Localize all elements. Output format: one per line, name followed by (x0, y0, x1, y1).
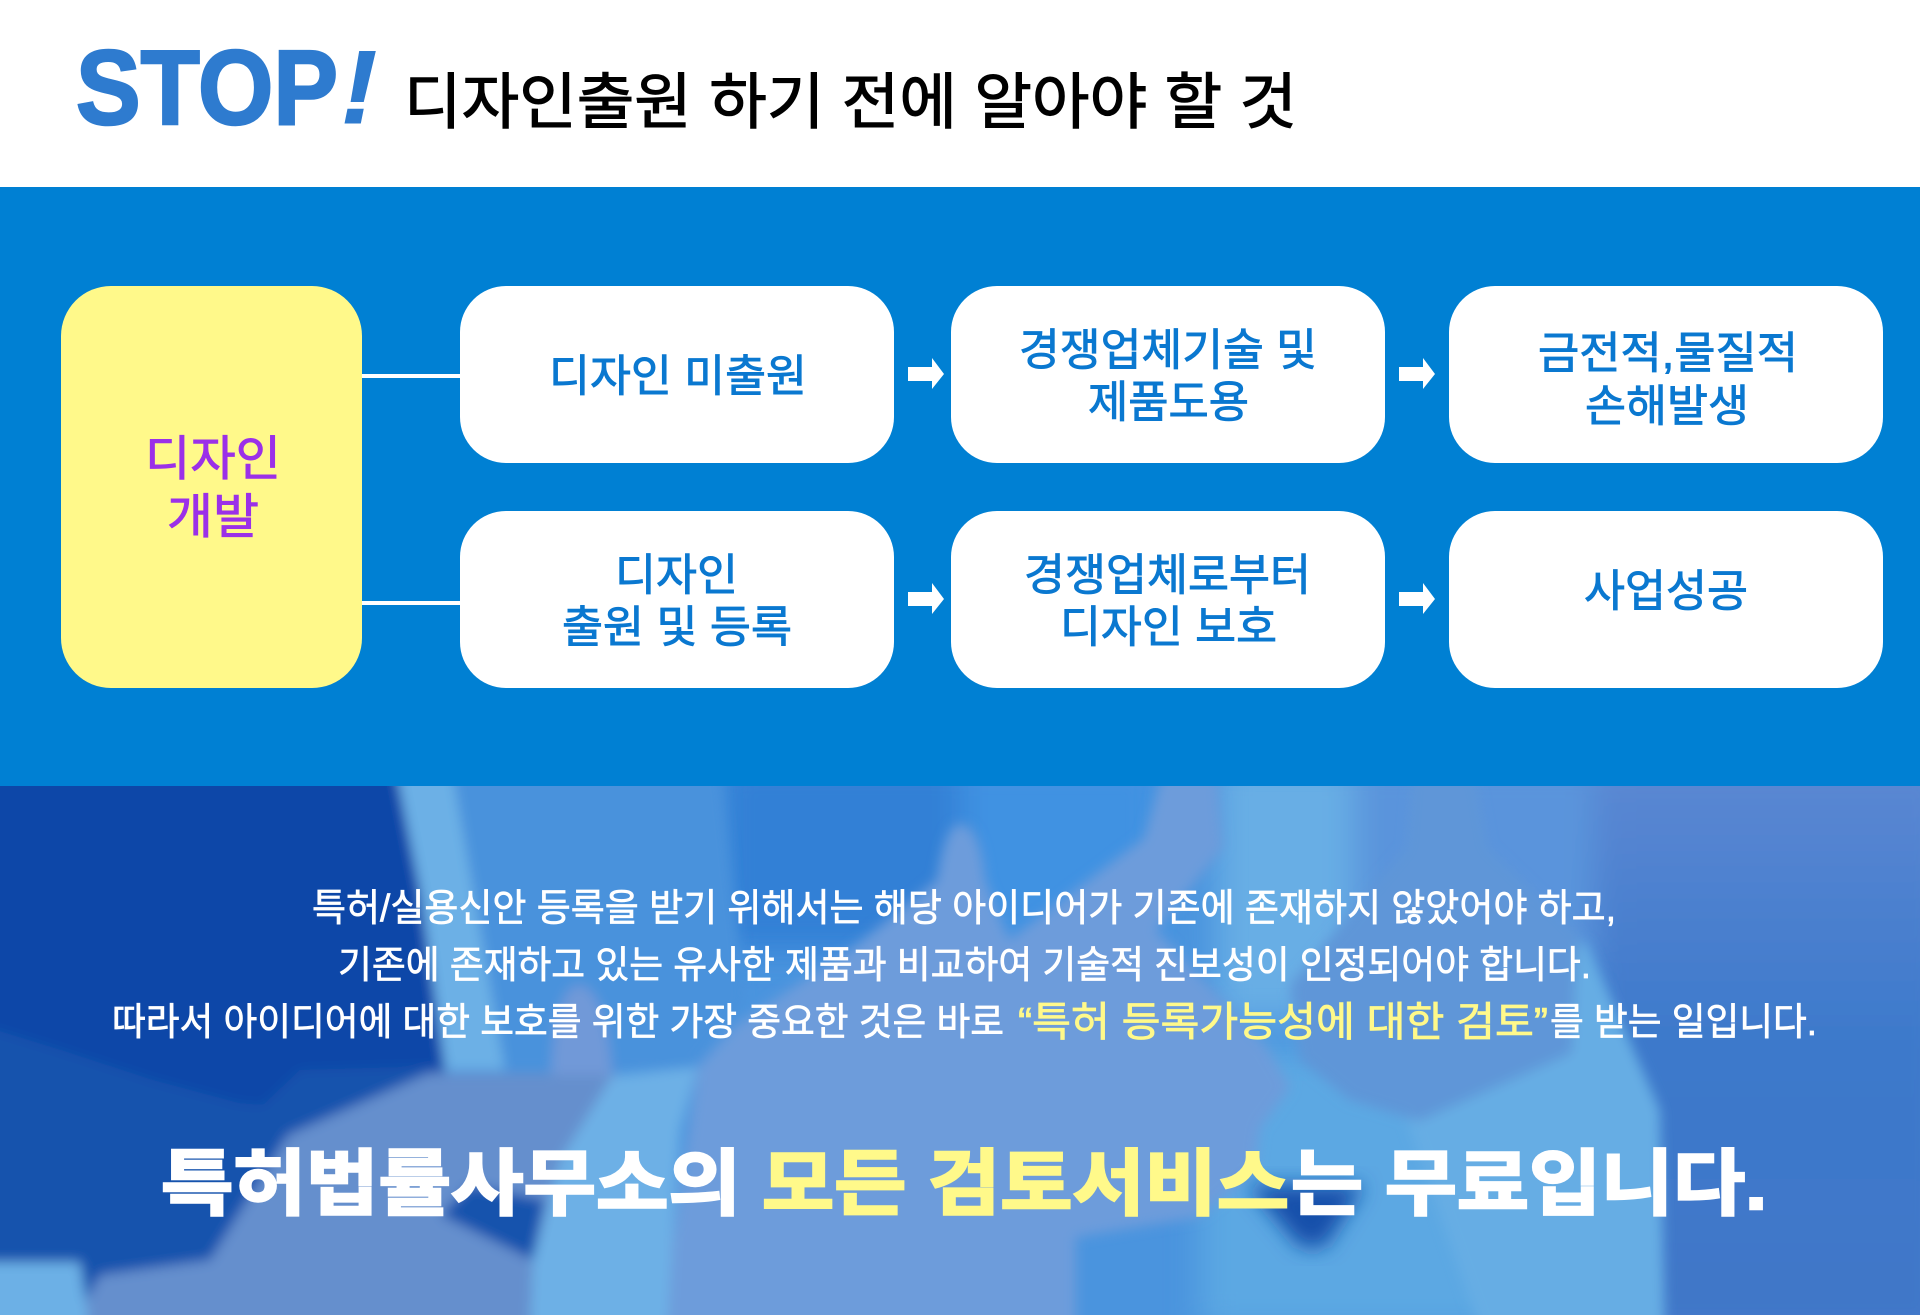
box: business success (1449, 511, 1883, 688)
paragraph line 3 with highlight: 를 받는 일입니다. (1550, 1002, 1817, 1044)
box: financial and material loss (1449, 286, 1883, 463)
connector: design development to bottom row (362, 601, 460, 605)
text block: explanation paragraph (112, 888, 1817, 1045)
paragraph line 3 with highlight (112, 999, 1817, 1045)
box: design application and registration (460, 511, 894, 688)
box: no design application: 디자인 미출원 (549, 352, 807, 401)
box: design application and registration: 디자인 (615, 551, 738, 600)
arrow: top row first (908, 358, 944, 389)
paragraph line 2: 기존에 존재하고 있는 유사한 제품과 비교하여 기술적 진보성이 인정되어야 합니다. (338, 945, 1591, 987)
logo word: STOP!: STOP (76, 29, 338, 147)
start box: design development: 디자인 (145, 433, 281, 486)
panel: process flow band (0, 187, 1920, 786)
box: no design application (460, 286, 894, 463)
box: financial and material loss: 손해발생 (1585, 382, 1749, 431)
headline: all review services are free: 모든 검토서비스 (762, 1145, 1289, 1225)
arrow: top row second (1399, 358, 1435, 389)
box: competitor copies technology and product: 경쟁업체기술 및 (1019, 326, 1317, 375)
headline: all review services are free: 특허법률사무소의 (161, 1145, 741, 1225)
start box: design development: 개발 (167, 491, 259, 544)
box: design protection from competitors: 디자인 보호 (1060, 603, 1277, 652)
background photo: blue tinted thumbs up (0, 760, 1920, 1315)
box: competitor copies technology and product: 제품도용 (1088, 378, 1249, 427)
box: design protection from competitors: 경쟁업체로부터 (1024, 551, 1311, 600)
paragraph line 1: 특허/실용신안 등록을 받기 위해서는 해당 아이디어가 기존에 존재하지 않았어야 하고, (312, 888, 1616, 930)
box: financial and material loss: 금전적,물질적 (1538, 329, 1798, 378)
title: 디자인출원 하기 전에 알아야 할 것 (404, 68, 1297, 136)
headline: all review services are free (161, 1145, 1767, 1225)
logo word: STOP!: ! (341, 30, 377, 146)
box: design application and registration: 출원 및 등록 (562, 603, 792, 652)
box: design protection from competitors (951, 511, 1385, 688)
header: white title area (0, 0, 1920, 187)
box: business success: 사업성공 (1584, 567, 1748, 616)
arrow: bottom row first (908, 583, 944, 614)
connector: design development to top row (362, 374, 460, 378)
headline: all review services are free: 는 무료입니다. (1291, 1145, 1767, 1225)
box: competitor copies technology and product (951, 286, 1385, 463)
paragraph line 3 with highlight: “특허 등록가능성에 대한 검토” (1018, 999, 1548, 1045)
start box: design development (61, 286, 362, 688)
arrow: bottom row second (1399, 583, 1435, 614)
paragraph line 3 with highlight: 따라서 아이디어에 대한 보호를 위한 가장 중요한 것은 바로 (112, 1002, 1004, 1044)
